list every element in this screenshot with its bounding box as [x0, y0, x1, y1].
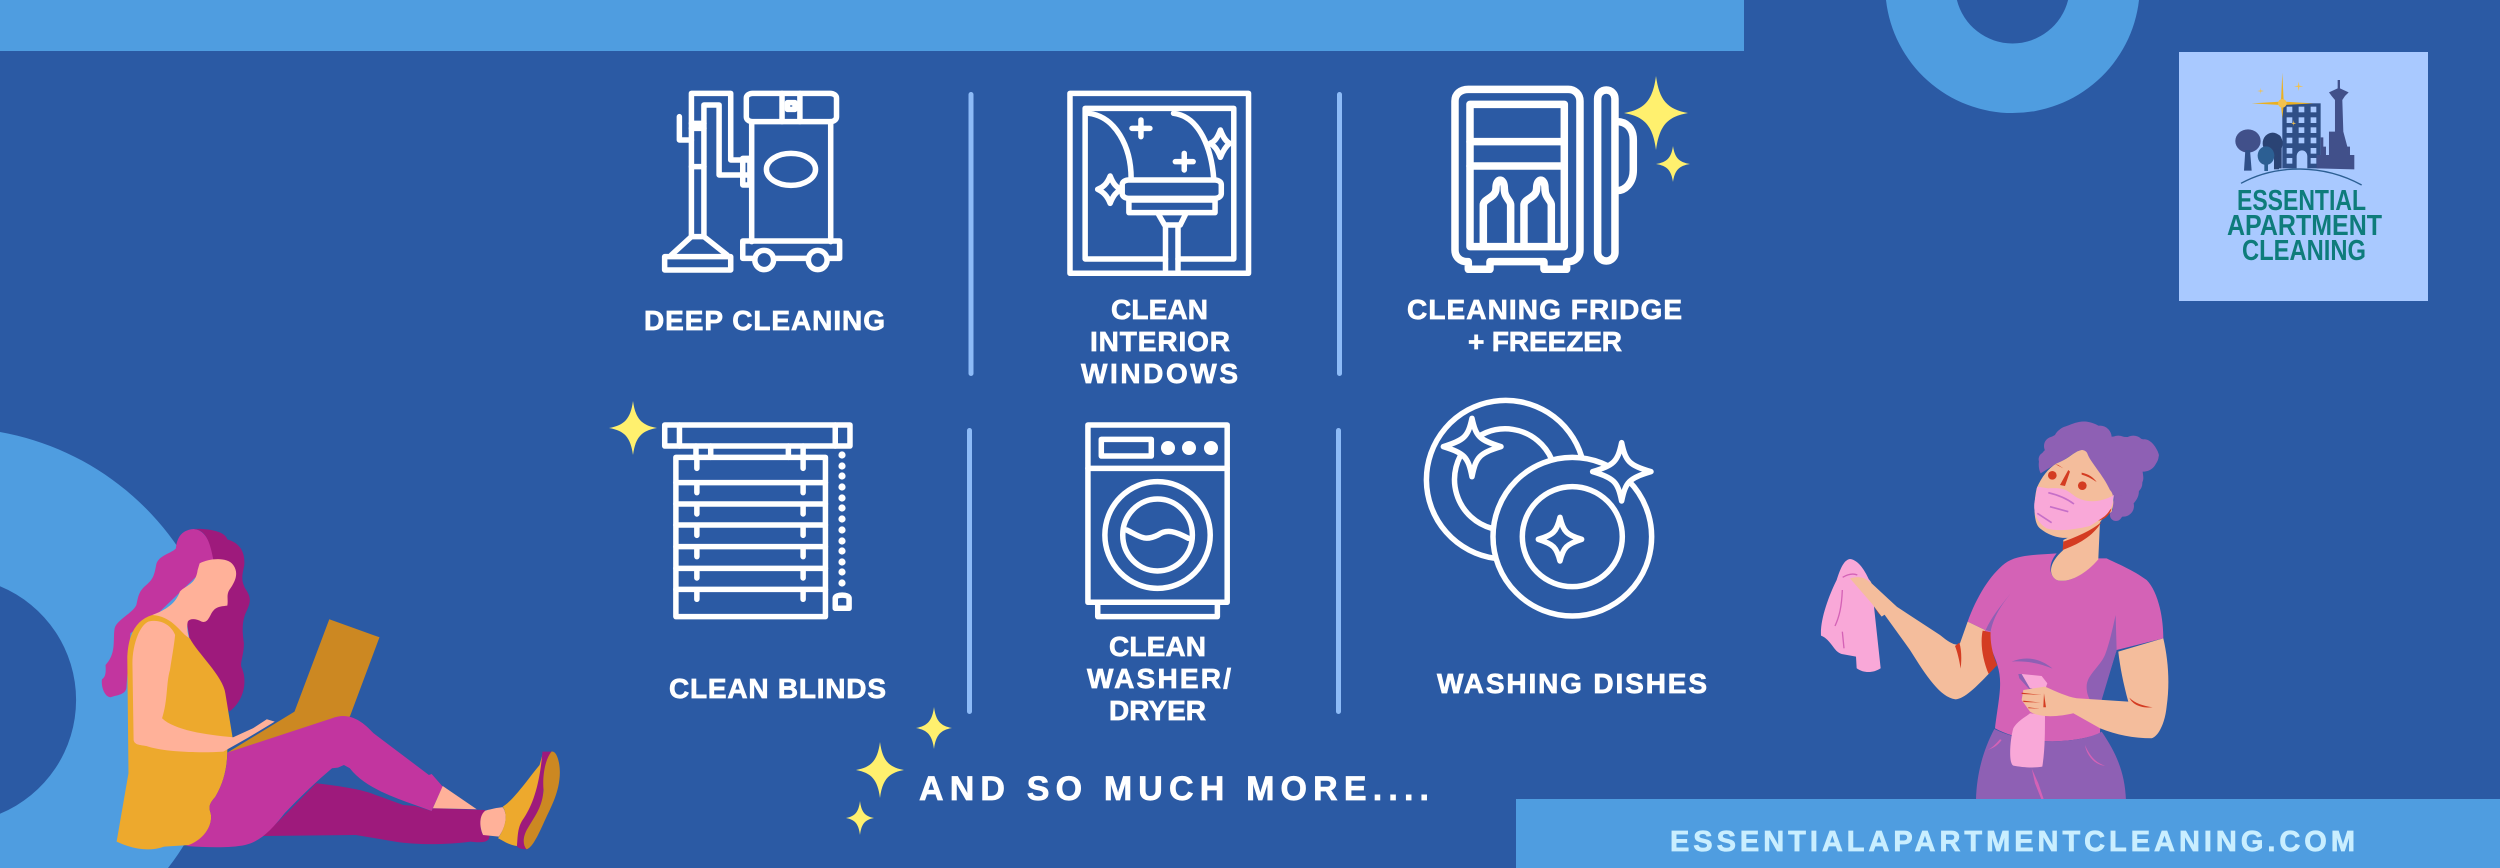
- icon: washer control buttons: [1161, 441, 1218, 455]
- icon: fridge with open door: [1455, 89, 1633, 269]
- closing line: and so much more: AND SO MUCH MORE....: [919, 770, 1429, 808]
- divider: bottom row right: [1336, 428, 1341, 714]
- service: deep cleaning: [644, 93, 885, 336]
- label: washing dishes: WASHING DISHES: [1437, 668, 1707, 699]
- label: clean washer/dryer: CLEAN: [1109, 631, 1206, 662]
- label: cleaning fridge + freezer: + FREEZER: [1468, 326, 1622, 357]
- logo wordmark: APARTMENT: [2227, 210, 2382, 242]
- divider: top row right: [1337, 92, 1342, 376]
- service: cleaning fridge + freezer: [1407, 89, 1682, 357]
- icon: window with squeegee: [1070, 93, 1249, 273]
- sparkle: footer bottom: [846, 801, 874, 835]
- label: clean interior windows: [1081, 294, 1238, 389]
- service: clean interior windows: [1070, 93, 1249, 389]
- icon: window blinds: [665, 425, 850, 617]
- label: clean interior windows: CLEAN: [1111, 294, 1208, 325]
- label: clean interior windows: INTERIOR: [1090, 326, 1230, 357]
- label: clean washer/dryer: DRYER: [1109, 695, 1206, 726]
- logo wordmark: [2227, 185, 2382, 267]
- footer bar: [1516, 799, 2500, 868]
- label: cleaning fridge + freezer: [1407, 294, 1682, 357]
- sparkle: footer middle: [856, 742, 904, 798]
- label: clean interior windows: WINDOWS: [1081, 358, 1238, 389]
- logo wordmark: CLEANING: [2242, 235, 2366, 267]
- logo artwork: skyline and trees: [2235, 73, 2362, 185]
- label: clean washer/dryer: [1087, 631, 1231, 726]
- logo wordmark: ESSENTIAL: [2237, 185, 2366, 217]
- top accent bar: [0, 0, 1744, 51]
- label: clean washer/dryer: WASHER/: [1087, 663, 1231, 694]
- top ring decoration: [1886, 0, 2139, 113]
- logo panel: [2179, 52, 2428, 301]
- website url: ESSENTIALAPARTMENTCLEANING.COM: [1670, 826, 2355, 858]
- service: washing dishes: [1426, 400, 1707, 699]
- sparkle: footer top: [916, 707, 952, 749]
- illustration: woman sitting with laptop: [102, 529, 560, 849]
- icon: sparkling plates: [1426, 400, 1652, 616]
- icon: carpet cleaning machine: [665, 93, 840, 270]
- divider: bottom row left: [967, 428, 972, 714]
- icon: washing machine: [1088, 425, 1227, 617]
- label: deep cleaning: DEEP CLEANING: [644, 305, 885, 336]
- sparkle: fridge small: [1656, 146, 1690, 182]
- icon: blinds pull cord beads: [838, 451, 846, 587]
- service: clean blinds: [665, 425, 886, 704]
- sparkle: fridge large: [1624, 76, 1688, 150]
- divider: top row left: [968, 92, 974, 376]
- label: clean blinds: CLEAN BLINDS: [669, 673, 886, 704]
- label: cleaning fridge + freezer: CLEANING FRIDGE: [1407, 294, 1682, 325]
- left ring decoration: [0, 432, 225, 868]
- illustration: masked woman with cloth and spray bottle: [1821, 421, 2168, 800]
- sparkle: blinds: [609, 401, 657, 455]
- service: clean washer/dryer: [1087, 425, 1231, 726]
